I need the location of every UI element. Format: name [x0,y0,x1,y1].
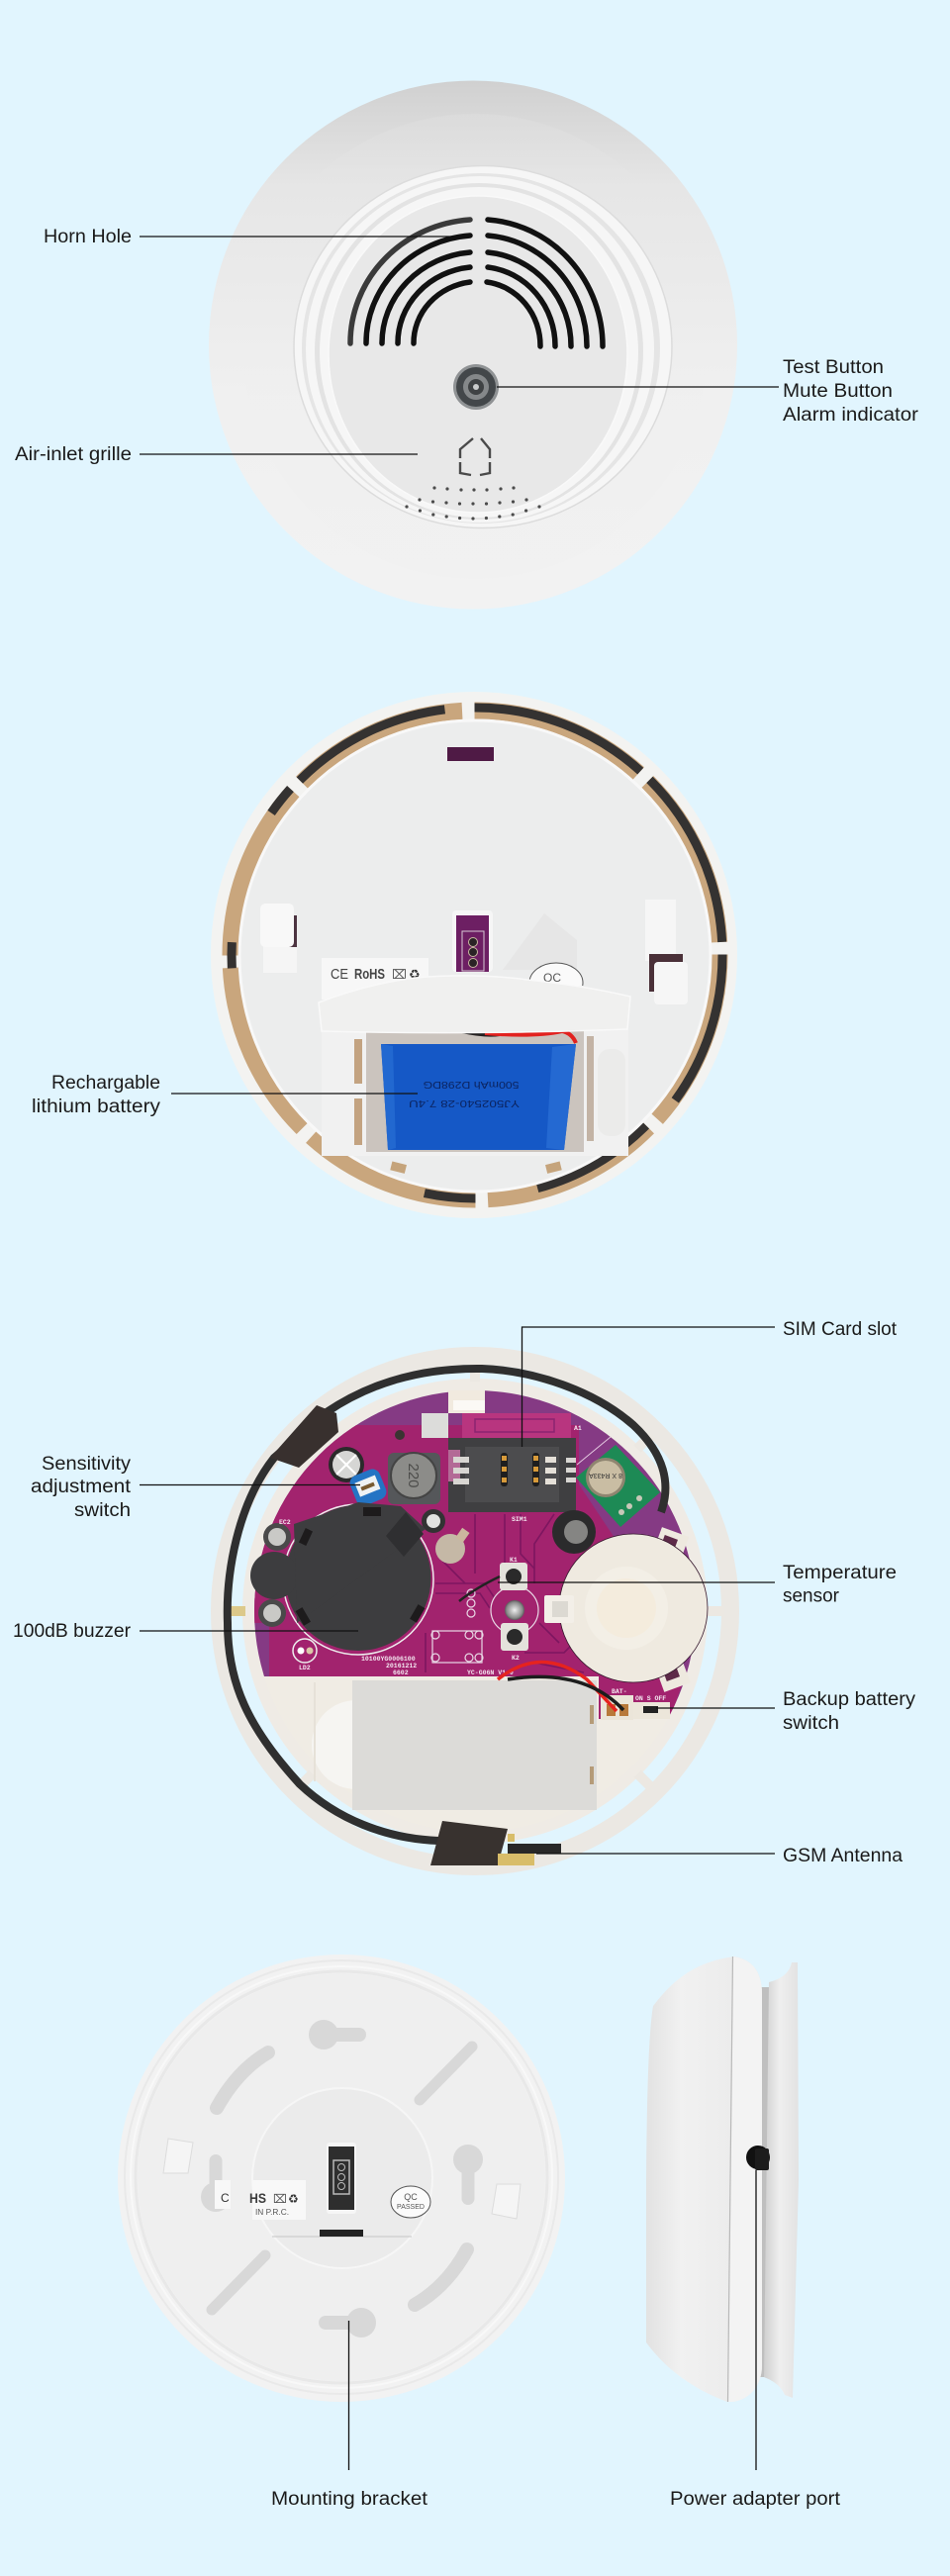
board silkscreen: LD2 [299,1665,311,1671]
battery bay [322,1029,628,1174]
center recess [252,2088,432,2268]
board silkscreen: YC-G06N V1.0 [467,1670,514,1676]
left latch [260,904,297,973]
square openings [163,2139,521,2219]
label: Sensitivity adjustment switch: adjustment [31,1477,132,1497]
lithium battery pack [381,1044,576,1150]
label: Air-inlet grille: Air-inlet grille [15,444,132,465]
battery connector and switch [601,1688,670,1720]
top PCB window [447,747,494,761]
QC PASSED sticker: PASSED [397,2204,425,2211]
label: Rechargable lithium battery: lithium battery [32,1097,161,1117]
label: Rechargable lithium battery: Rechargable [51,1073,160,1094]
small components [258,1430,470,1663]
QC sticker: QC [543,971,561,985]
seam [728,1956,732,2402]
body right segment [728,1956,762,2402]
panel: rear mounting plate [118,1955,565,2510]
plate disc [118,1955,565,2402]
main body [646,1956,762,2402]
straight vent slots [212,2047,472,2310]
relay footprint [431,1586,538,1663]
horn hole slots [350,220,603,346]
label: Sensitivity adjustment switch [31,1454,360,1521]
circuit board [247,1385,703,1719]
label: Mounting bracket: Mounting bracket [271,2489,428,2510]
cable tape upper [270,1405,338,1468]
thin sensor lead [459,1576,500,1601]
label: Sensitivity adjustment switch: switch [74,1500,131,1521]
inner frame [248,1384,702,1838]
right latch [645,900,688,1004]
frame spokes [226,1362,724,1787]
green RF module [576,1445,660,1527]
concentric ribs [242,114,708,579]
100dB buzzer housing [250,1502,433,1655]
panel: front view of detector [15,81,919,610]
white piezo sounder disc [544,1527,708,1692]
lower plastic tray with dome [312,1682,401,1789]
plate rim ribs [125,1960,558,2394]
label: Test / Mute / Alarm: Test Button [783,357,884,378]
label: Temperature sensor: Temperature [783,1563,897,1583]
board silkscreen: 20161212 [386,1663,417,1670]
label: Sensitivity adjustment switch: Sensitivity [42,1454,132,1475]
SIM card slot [448,1438,576,1512]
green RF module: 8 X R433A [589,1472,622,1479]
board silkscreen: K2 [512,1655,520,1662]
board silkscreen: K1 [510,1557,518,1564]
rating sticker: IN P.R.C. [255,2208,289,2217]
top connector [422,1390,485,1438]
outer shell disc [209,81,737,610]
keyhole left with sticker corner [201,2154,231,2212]
label: Backup battery switch [656,1689,916,1734]
curved vent slots [217,2052,467,2305]
label: Power adapter port: Power adapter port [670,2489,841,2510]
copper traces [426,1514,584,1672]
compliance sticker [322,958,428,1000]
battery connector and switch: BAT- [612,1688,627,1695]
outer housing [211,692,737,1218]
GSM antenna tape and lead [430,1821,561,1865]
lithium battery pack: YJ502540-28 7.4U [409,1097,520,1109]
board silkscreen: 10100YG0006100 [361,1656,416,1663]
QC PASSED sticker: QC [404,2192,418,2202]
keyhole bottom [319,2308,376,2337]
board silkscreen: 6602 [393,1670,409,1676]
faint triangular film [503,913,577,970]
icon: house outline [460,438,490,475]
compliance sticker: CE [331,966,348,983]
keyhole left with sticker corner: C [221,2191,230,2205]
label: Test / Mute / Alarm: Alarm indicator [783,405,919,426]
base flange [764,1962,799,2398]
label: Backup battery switch: switch [783,1713,839,1734]
battery leads [498,1663,623,1711]
backup battery pack [352,1680,597,1810]
keyhole right [453,2145,483,2205]
label: 100dB buzzer: 100dB buzzer [13,1621,132,1642]
adjustment potentiometer [347,1467,389,1508]
label: Horn Hole: Horn Hole [44,227,132,247]
electrolytic capacitor [329,1447,364,1482]
antenna cable [228,1369,665,1841]
keyhole top [309,2020,366,2050]
panel: battery compartment view [33,692,737,1218]
board silkscreen: A1 [574,1425,582,1432]
battery connector and switch: ON S OFF [635,1695,666,1702]
power inductor: 220 [405,1463,422,1488]
label: Rechargable lithium battery [32,1073,418,1117]
QC sticker [528,962,584,986]
compliance sticker: ♻ [409,967,421,982]
lithium battery pack: 500mAh D298DG [424,1079,519,1091]
board silkscreen: EC2 [279,1519,291,1526]
panel: side view [646,1956,841,2510]
label: Test / Mute / Alarm: Mute Button [783,381,893,402]
label: Backup battery switch: Backup battery [783,1689,916,1710]
plate face [138,1973,545,2381]
black microphone [552,1510,596,1554]
compliance sticker: RoHS [354,966,385,983]
label: SIM Card slot: SIM Card slot [783,1319,898,1340]
power adapter port [746,2146,770,2170]
label: SIM Card slot [522,1319,898,1447]
label: Temperature sensor: sensor [783,1585,840,1607]
outer ring [220,1356,730,1866]
inner cover plate [239,720,711,1192]
battery wires [462,1031,576,1043]
rating sticker: ⌧ [273,2192,287,2206]
tact switches and LED [500,1563,528,1651]
label: GSM Antenna: GSM Antenna [783,1846,902,1866]
compliance sticker: ⌧ [392,967,407,982]
test button [453,364,499,410]
board silkscreen: SIM1 [512,1516,527,1523]
battery door [319,976,630,1033]
board silkscreen [279,1425,582,1676]
label: Test / Mute / Alarm [497,357,919,426]
rating sticker [249,2180,306,2220]
ring channel with cable [125,605,825,1305]
panel: circuit board view [13,1319,916,1866]
rating sticker: ♻ [288,2192,299,2206]
label: Temperature sensor [498,1563,897,1607]
air inlet dots [405,486,541,521]
rating sticker: HS [249,2190,266,2206]
neck [758,1987,771,2377]
power inductor [388,1453,440,1504]
QC PASSED sticker [391,2186,430,2218]
center PCB contact window [452,910,493,972]
rear contact window [320,2143,363,2237]
